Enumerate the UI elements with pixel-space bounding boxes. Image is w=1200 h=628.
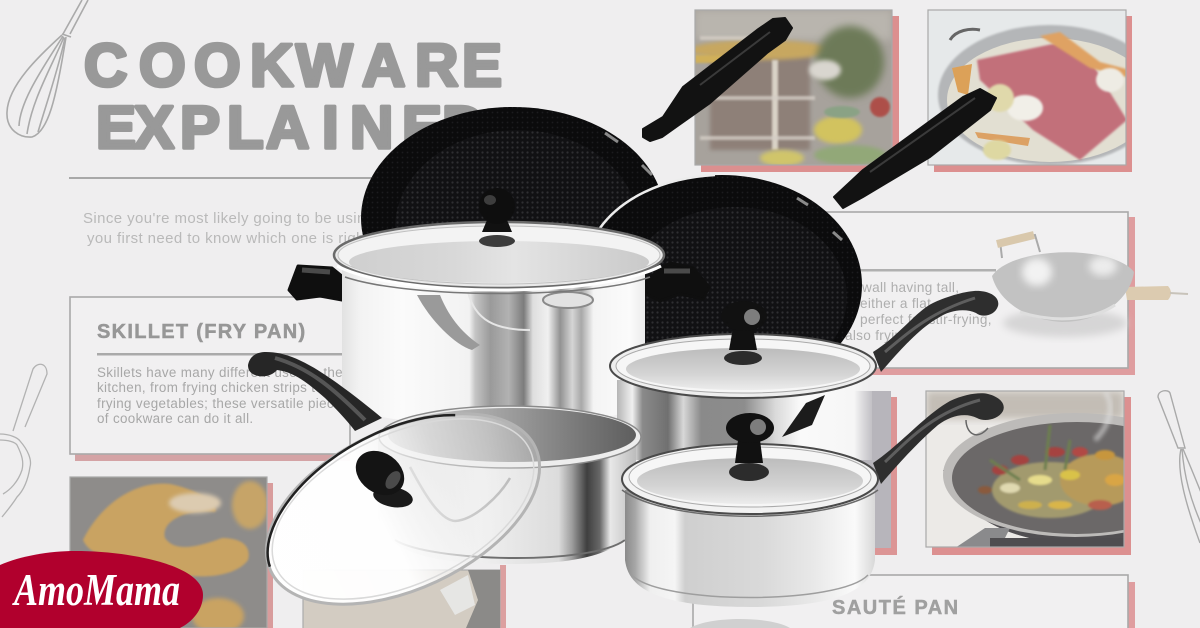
stock pot right handle [641, 263, 709, 301]
icon: whisk right [1158, 391, 1200, 543]
intro text [83, 210, 374, 247]
front saucepan body [625, 490, 875, 607]
skillet description: kitchen, from frying chicken strips to [97, 380, 323, 395]
wok description: wall having tall, [861, 280, 959, 295]
stock pot lid knob [479, 235, 515, 247]
large pan disc [361, 107, 665, 329]
wok description: either a flat or [860, 296, 948, 311]
saucepan front right with lid [622, 393, 1004, 607]
icon: small pan outline left [0, 364, 47, 517]
title: COOKWARE [84, 32, 502, 99]
saute pan heading: SAUTÉ PAN [832, 596, 960, 619]
skillet description: Skillets have many different uses in the [97, 365, 343, 380]
frying pan large back [361, 18, 792, 329]
panel: stir fry photo [925, 390, 1131, 555]
logo: AmoMama badge [0, 551, 203, 628]
front saucepan knob [729, 463, 769, 481]
panel: saute pan card [690, 575, 1135, 628]
front saucepan lid [622, 444, 878, 514]
skillet description: frying vegetables; these versatile pieces [97, 396, 349, 411]
icon: wok [992, 235, 1188, 337]
stock pot with lid [289, 188, 709, 425]
panel: lower centre photo [303, 565, 506, 628]
panel: fried chicken photo [70, 477, 273, 628]
intro text: Since you're most likely going to be using [83, 210, 374, 227]
panel: steamer photo [690, 10, 899, 172]
panel: middle photo [800, 391, 897, 555]
title rule [69, 177, 375, 179]
deep pot rim [379, 406, 641, 468]
large pan handle [643, 18, 792, 141]
medium saucepan body [617, 380, 872, 460]
skillet description [97, 365, 349, 426]
glass lid knob [347, 442, 414, 510]
wok description [845, 280, 992, 343]
front saucepan handle [873, 393, 1004, 484]
deep pot handle [248, 352, 382, 431]
panel: wok card [780, 212, 1188, 375]
medium saucepan handle [873, 291, 998, 372]
stock pot left handle [289, 266, 359, 302]
skillet description: of cookware can do it all. [97, 411, 253, 426]
small pan disc [582, 175, 862, 395]
stock pot lid [334, 222, 664, 288]
wok description: perfect for stir-frying, [860, 312, 992, 327]
deep pot body [378, 440, 636, 564]
wok description: also frying [845, 328, 910, 343]
medium saucepan knob [724, 351, 762, 365]
medium saucepan lid [610, 334, 876, 398]
saucepan medium with lid [610, 291, 998, 460]
panel: skillet card [70, 297, 350, 461]
panel: braised meat photo [927, 9, 1132, 172]
logo wordmark: AmoMama [12, 565, 180, 615]
small pan handle [834, 89, 996, 208]
stock pot body [342, 262, 645, 425]
intro text: you first need to know which one is right [87, 230, 370, 247]
frying pan small back [582, 89, 996, 395]
glass lid leaning [237, 375, 569, 628]
title: EXPLAINED [96, 94, 485, 161]
icon: whisk top left [7, 0, 88, 137]
title [84, 32, 502, 161]
skillet heading: SKILLET (FRY PAN) [97, 321, 307, 343]
saucepan deep left [248, 352, 641, 564]
